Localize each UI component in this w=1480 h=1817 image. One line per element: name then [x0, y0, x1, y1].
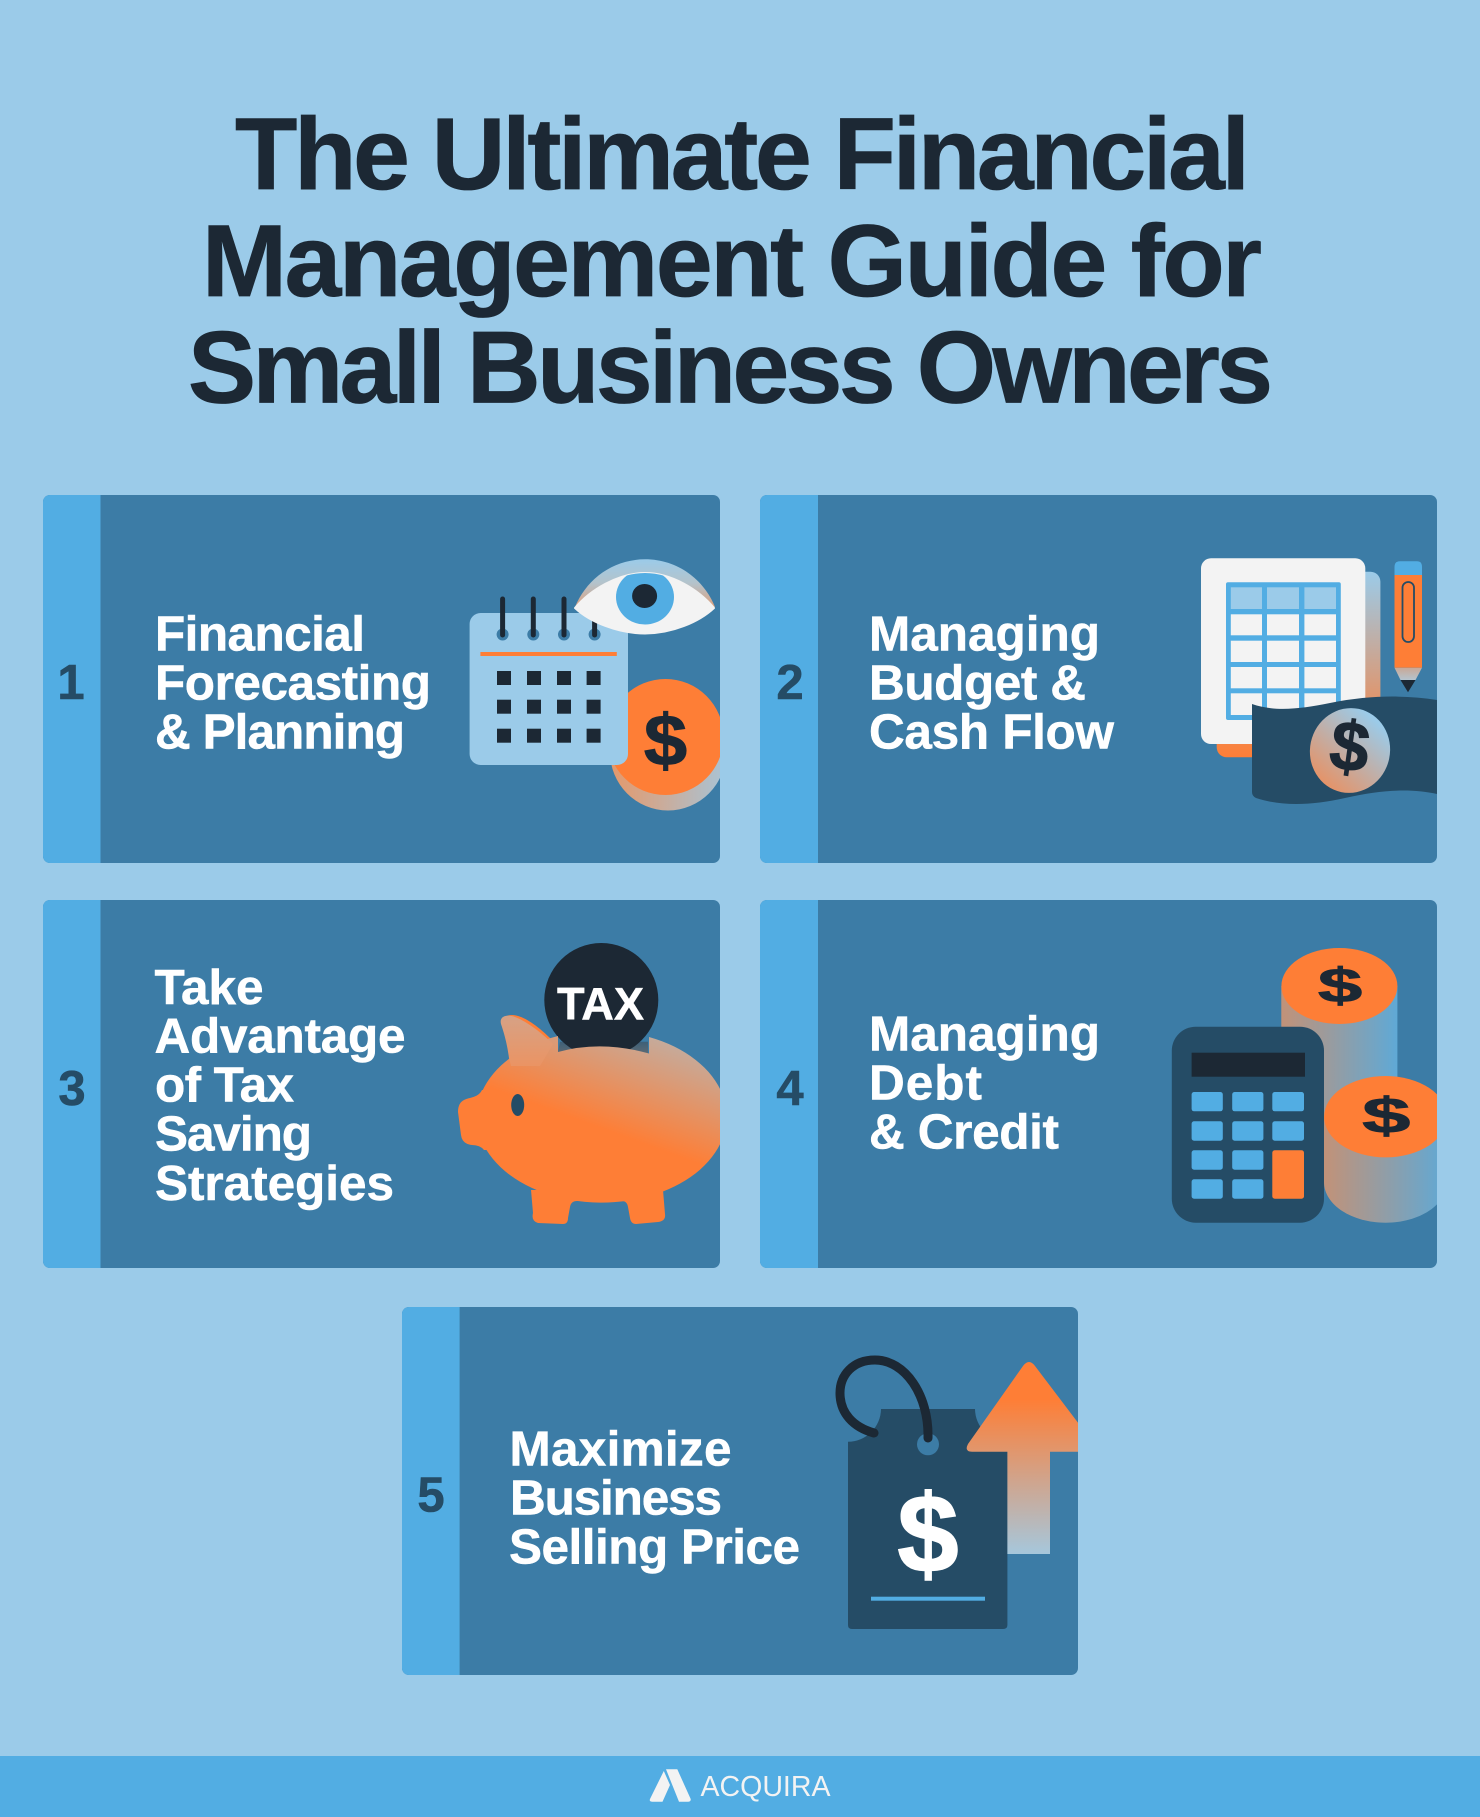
panel: 4 managing debt and credit: [760, 900, 1447, 1268]
heading: managing debt and credit: [869, 1007, 1100, 1159]
icon: calendar, eye and coin: $: [644, 700, 687, 780]
heading: take advantage of tax saving strategies: [154, 960, 406, 1211]
number 4: 4: [776, 1062, 804, 1116]
heading: financial forecasting and planning: Financial: [155, 607, 365, 662]
heading: take advantage of tax saving strategies: Saving: [155, 1107, 312, 1162]
heading: managing budget and cash flow: [869, 607, 1114, 759]
brand name: ACQUIRA: [700, 1771, 831, 1803]
icon: price tag with up arrow: [840, 1360, 1100, 1629]
heading: maximize business selling price: [509, 1422, 800, 1574]
heading: take advantage of tax saving strategies: of Tax: [155, 1058, 294, 1113]
heading: managing budget and cash flow: Cash Flow: [869, 704, 1114, 759]
heading: maximize business selling price: Selling Price: [509, 1519, 800, 1574]
heading: managing debt and credit: Debt: [869, 1055, 982, 1110]
icon: calendar, eye and coin: [470, 559, 726, 810]
icon: price tag with up arrow: $: [897, 1473, 959, 1596]
icon: spreadsheet, pencil and banknote: $: [1325, 705, 1375, 788]
heading: take advantage of tax saving strategies: Advantage: [154, 1009, 406, 1064]
panel: 1 financial forecasting and planning: [43, 495, 726, 863]
tax label: TAX: [557, 978, 644, 1029]
panel: 5 maximize business selling price: [402, 1307, 1100, 1675]
number 1: 1: [57, 656, 85, 710]
title: The Ultimate Financial: [235, 97, 1250, 211]
icon: piggy bank with tax coin: [458, 943, 727, 1224]
heading: financial forecasting and planning: [155, 607, 431, 759]
title: Management Guide for: [202, 204, 1262, 318]
heading: maximize business selling price: Maximize: [510, 1422, 732, 1477]
title: [188, 97, 1273, 425]
number 2: 2: [776, 656, 804, 710]
icon: coin stacks and calculator: [1172, 948, 1447, 1223]
icon: coin stacks and calculator: $: [1318, 958, 1362, 1012]
icon: spreadsheet, pencil and banknote: [1201, 558, 1437, 804]
panel: 2 managing budget and cash flow: [760, 495, 1437, 863]
heading: take advantage of tax saving strategies: Strategies: [155, 1156, 394, 1211]
heading: managing budget and cash flow: Managing: [869, 607, 1100, 662]
heading: take advantage of tax saving strategies: Take: [154, 960, 264, 1015]
heading: managing budget and cash flow: Budget &: [869, 655, 1086, 710]
number 5: 5: [417, 1469, 445, 1523]
heading: financial forecasting and planning: & Planning: [155, 704, 405, 759]
heading: financial forecasting and planning: Forecasting: [155, 655, 431, 710]
title: Small Business Owners: [188, 311, 1273, 425]
logo: acquira mark: [650, 1769, 691, 1802]
heading: managing debt and credit: & Credit: [869, 1104, 1059, 1159]
heading: maximize business selling price: Business: [510, 1470, 722, 1525]
number 3: 3: [58, 1062, 86, 1116]
panel: 3 take advantage of tax saving strategies: [43, 900, 727, 1268]
icon: coin stacks and calculator: $: [1362, 1088, 1410, 1144]
heading: managing debt and credit: Managing: [869, 1007, 1100, 1062]
footer bar: [0, 1756, 1480, 1817]
